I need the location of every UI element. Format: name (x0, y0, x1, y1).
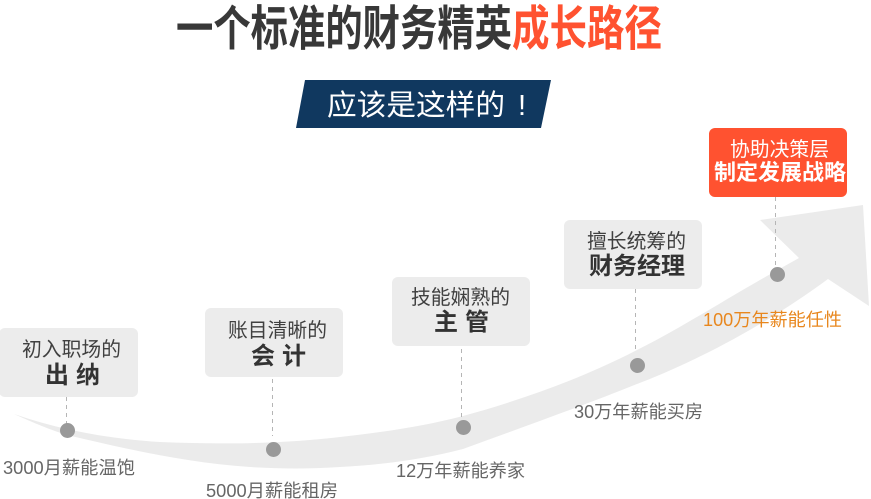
box: 出纳: 初入职场的 (22, 338, 121, 361)
box: 会计 (205, 308, 343, 377)
box: 决策层 (709, 128, 847, 197)
box: 主管 (392, 277, 530, 346)
label: 12万: 12万年薪能养家 (396, 461, 525, 481)
box: 决策层: 协助决策层 (730, 138, 829, 161)
box: 财务经理: 擅长统筹的 (587, 230, 686, 253)
box: 决策层: 制定发展战略 (714, 160, 846, 185)
box: 出纳: 出纳 (45, 362, 100, 389)
title: 成长路径 (512, 3, 662, 56)
subtitle banner: ! (518, 90, 526, 122)
milestone dot: 5000 (266, 442, 281, 457)
subtitle banner: 应该是这样的 (327, 89, 505, 122)
box: 主管: 主管 (434, 309, 489, 336)
subtitle banner (296, 80, 551, 128)
label: 3000: 3000月薪能温饱 (3, 458, 135, 478)
milestone dot: 100万 (770, 267, 785, 282)
milestone dot: 3000 (60, 423, 75, 438)
milestone dot: 30万 (630, 358, 645, 373)
title: 一个标准的财务精英 (176, 3, 512, 56)
box: 出纳 (0, 328, 138, 397)
connector lines (66, 197, 776, 436)
box: 财务经理 (564, 220, 702, 289)
box: 会计: 会计 (251, 343, 306, 370)
label: 30万: 30万年薪能买房 (574, 402, 703, 422)
milestone dot: 12万 (456, 420, 471, 435)
box: 财务经理: 财务经理 (589, 253, 685, 280)
growth arrow (14, 205, 869, 468)
box: 会计: 账目清晰的 (228, 319, 327, 342)
label: 100万: 100万年薪能任性 (703, 310, 842, 330)
box: 主管: 技能娴熟的 (411, 286, 510, 309)
